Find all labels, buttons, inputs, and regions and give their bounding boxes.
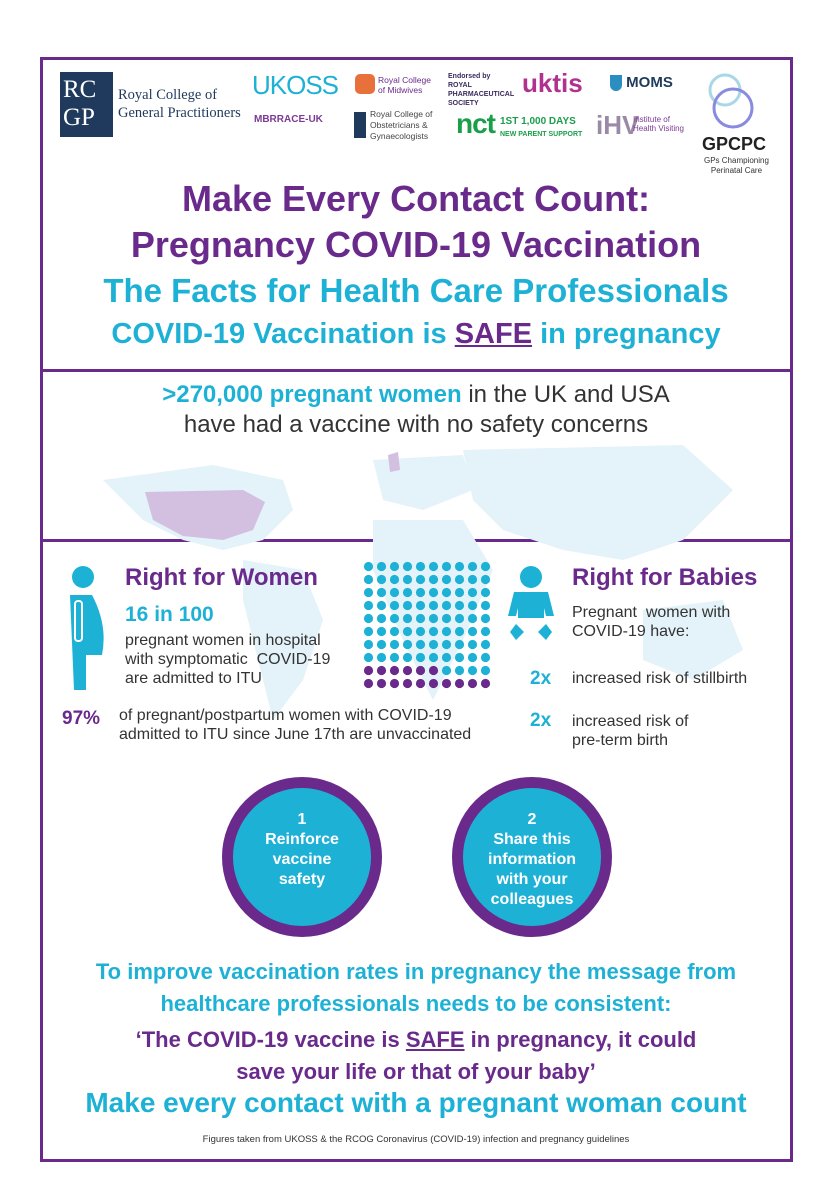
logo: 1000 days: 1ST 1,000 DAYS xyxy=(500,116,576,127)
message: To improve vaccination rates in pregnancy the message from xyxy=(96,959,736,984)
logo text: RCOG xyxy=(370,109,432,141)
logo text: iHV xyxy=(633,115,684,133)
logo: GPCPC icon xyxy=(708,74,754,128)
logo text: RCM: Royal College xyxy=(378,75,431,85)
circle 2 xyxy=(452,777,612,937)
logo: iHV: iHV xyxy=(596,110,639,140)
logo text: RCOG: Royal College of xyxy=(370,109,432,119)
logo: 1000 days: NEW PARENT SUPPORT xyxy=(500,131,582,138)
world map background xyxy=(103,445,743,719)
logo: 1000 days xyxy=(500,116,582,138)
babies text: COVID-19 have: xyxy=(572,623,689,640)
logo: RCGP: RC xyxy=(63,76,96,103)
stat 270,000 xyxy=(162,381,670,438)
logo text: RCGP: Royal College of xyxy=(118,87,217,103)
subtitle: The Facts for Health Care Professionals xyxy=(103,272,729,309)
stat 16 in 100: are admitted to ITU xyxy=(125,670,262,687)
stat stillbirth xyxy=(530,668,747,689)
dot grid xyxy=(364,562,490,688)
icon: baby xyxy=(508,566,554,640)
circle 1: vaccine xyxy=(273,851,331,868)
logo: RCGP: GP xyxy=(63,104,95,131)
circle 1: 1 xyxy=(298,811,306,828)
quote: ‘The COVID-19 vaccine is SAFE in pregnancy, it could xyxy=(136,1027,696,1052)
safe statement: COVID-19 Vaccination is SAFE in pregnancy xyxy=(111,318,721,350)
logo text: iHV: Health Visiting xyxy=(633,124,684,133)
footnote: Figures taken from UKOSS & the RCOG Coronavirus (COVID-19) infection and pregnancy guidelines xyxy=(203,1134,629,1145)
stat 97% xyxy=(62,707,471,743)
title: Make Every Contact Count: xyxy=(182,178,650,219)
stat 97%: 97% xyxy=(62,708,100,729)
circle 2: with your xyxy=(496,871,568,888)
logo: UKOSS: UKOSS xyxy=(252,70,338,100)
stat 16 in 100 xyxy=(125,603,330,687)
logo: RCOG xyxy=(354,112,366,138)
stat 16 in 100: pregnant women in hospital xyxy=(125,632,321,649)
circle 1: Reinforce xyxy=(265,831,339,848)
circle 1 xyxy=(222,777,382,937)
logo: uktis: uktis xyxy=(522,68,583,98)
stat preterm: pre-term birth xyxy=(572,732,668,749)
message: healthcare professionals needs to be consistent: xyxy=(160,991,672,1016)
logo: RPS xyxy=(448,72,514,107)
logo: GPCPC subtitle xyxy=(704,156,769,175)
logo: RPS: SOCIETY xyxy=(448,100,479,107)
stat 270,000: >270,000 pregnant women in the UK and USA xyxy=(162,381,670,408)
logo text: RCGP: General Practitioners xyxy=(118,105,241,121)
heading: right for women: Right for Women xyxy=(125,564,318,591)
message xyxy=(96,959,736,1016)
logo text: RCGP xyxy=(118,87,241,121)
stat preterm: increased risk of xyxy=(572,713,688,730)
stat preterm xyxy=(530,710,688,749)
logos xyxy=(60,68,769,175)
logo: RCGP xyxy=(60,72,113,137)
circle 2: information xyxy=(488,851,576,868)
logo: GPCPC subtitle: Perinatal Care xyxy=(711,166,762,175)
logo: MOMS: MOMS xyxy=(626,74,673,91)
logo: MBRRACE: MBRRACE-UK xyxy=(254,114,323,125)
heading: right for babies: Right for Babies xyxy=(572,564,757,591)
logo: GPCPC subtitle: GPs Championing xyxy=(704,156,769,165)
babies text xyxy=(572,604,730,640)
logo text: RCM xyxy=(378,75,431,95)
title xyxy=(131,178,701,265)
circle 2: 2 xyxy=(528,811,536,828)
stat 16 in 100: with symptomatic COVID-19 xyxy=(125,651,330,668)
stat 270,000: have had a vaccine with no safety concerns xyxy=(184,411,648,438)
stat 16 in 100: 16 in 100 xyxy=(125,603,214,626)
babies text: Pregnant women with xyxy=(572,604,730,621)
circle 1: safety xyxy=(279,871,325,888)
stat 97%: of pregnant/postpartum women with COVID-19 xyxy=(119,707,452,724)
circle 2: Share this xyxy=(493,831,571,848)
stat preterm: 2x xyxy=(530,710,551,731)
logo text: RCM: of Midwives xyxy=(378,85,422,95)
logo text: RCOG: Gynaecologists xyxy=(370,131,428,141)
logo: RPS: ROYAL xyxy=(448,82,472,89)
logo text: RCOG: Obstetricians & xyxy=(370,120,428,130)
icon: pregnant woman xyxy=(70,566,104,690)
logo: nct: nct xyxy=(456,108,495,139)
stat stillbirth: increased risk of stillbirth xyxy=(572,670,747,687)
logo: RCM xyxy=(355,74,375,94)
quote xyxy=(136,1027,696,1084)
quote: save your life or that of your baby’ xyxy=(236,1059,596,1084)
stat 97%: admitted to ITU since June 17th are unvaccinated xyxy=(119,726,471,743)
logo text: iHV: Institute of xyxy=(633,115,670,124)
logo: RPS: PHARMACEUTICAL xyxy=(448,91,514,98)
circle 2: colleagues xyxy=(491,891,573,908)
call to action: Make every contact with a pregnant woman count xyxy=(85,1087,747,1118)
title: Pregnancy COVID-19 Vaccination xyxy=(131,224,701,265)
logo: RPS: Endorsed by xyxy=(448,73,490,80)
stat stillbirth: 2x xyxy=(530,668,551,689)
logo: GPCPC text: GPCPC xyxy=(702,134,766,154)
